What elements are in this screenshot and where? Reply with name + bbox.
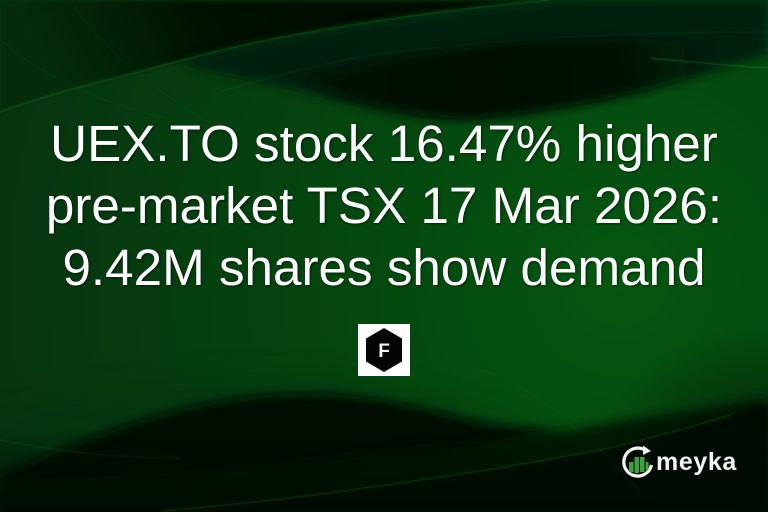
meyka logo [622, 446, 737, 478]
wordmark: meyka [656, 448, 737, 476]
title: 9.42M shares show demand [62, 239, 706, 296]
bottom dark hill layers [0, 376, 620, 512]
title [46, 115, 722, 296]
icon: F hexagon logo [358, 324, 410, 376]
title: UEX.TO stock 16.47% higher [50, 115, 718, 172]
top dark swoosh layers [0, 0, 549, 112]
icon: meyka ring with bars [622, 446, 653, 478]
icon: F hexagon logo: F [378, 341, 390, 362]
title: pre-market TSX 17 Mar 2026: [46, 177, 722, 234]
